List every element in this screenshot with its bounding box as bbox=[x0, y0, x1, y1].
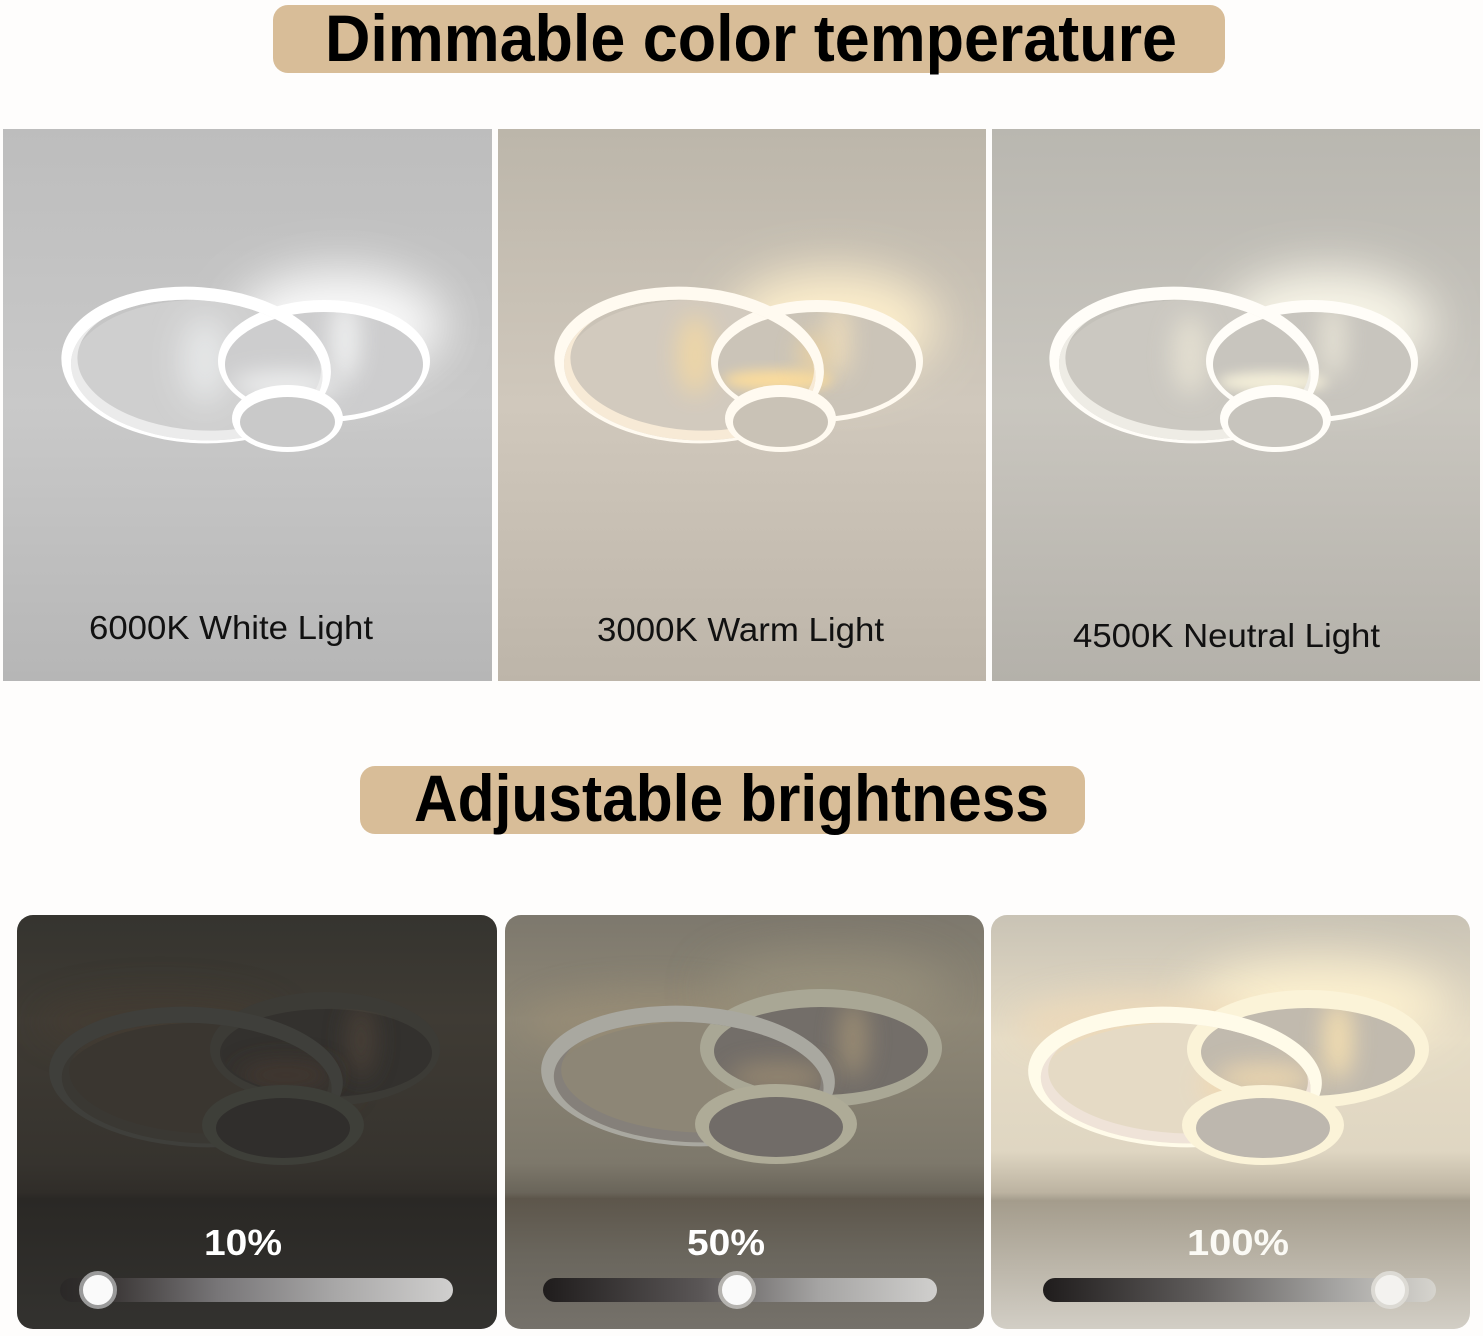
panel: 3000K warm light bbox=[498, 129, 986, 681]
label: 10%: 10% bbox=[204, 1222, 282, 1263]
panel: 6000K white light bbox=[3, 129, 492, 681]
icon: ceiling lamp, warm bbox=[549, 278, 923, 452]
icon: ceiling lamp, full bbox=[1025, 990, 1429, 1165]
icon: ceiling lamp, dim bbox=[50, 1007, 432, 1165]
label: 4500K: 4500K Neutral Light bbox=[1073, 617, 1380, 654]
panel: 100% brightness bbox=[991, 915, 1470, 1329]
slider: 100% bbox=[1043, 1273, 1436, 1307]
panel: 50% brightness bbox=[505, 915, 984, 1329]
icon: ceiling lamp, half bbox=[538, 989, 942, 1164]
heading: dimmable color temperature: Dimmable color temperature bbox=[325, 1, 1177, 75]
label: 100%: 100% bbox=[1187, 1222, 1289, 1263]
icon: ceiling lamp, neutral bbox=[1044, 278, 1418, 452]
panel: 10% brightness bbox=[17, 915, 497, 1329]
label: 50%: 50% bbox=[687, 1222, 765, 1263]
icon: ceiling lamp, white bbox=[56, 278, 430, 452]
slider: 50% bbox=[543, 1273, 937, 1307]
label: 6000K: 6000K White Light bbox=[89, 609, 373, 646]
heading: adjustable brightness: Adjustable brightness bbox=[414, 761, 1049, 835]
panel: 4500K neutral light bbox=[992, 129, 1480, 681]
slider: 10% bbox=[60, 1273, 453, 1307]
label: 3000K: 3000K Warm Light bbox=[597, 611, 884, 648]
